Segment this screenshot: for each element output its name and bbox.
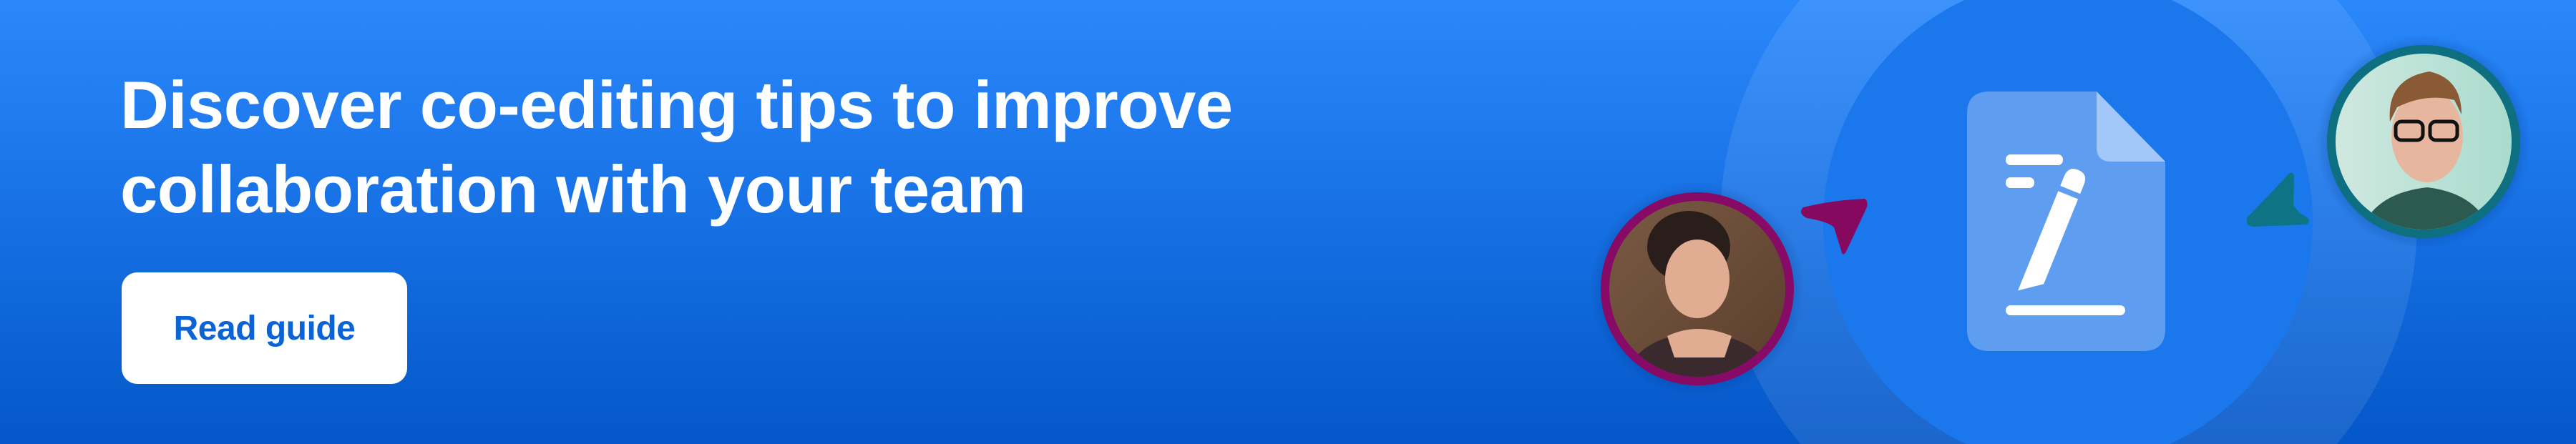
arrow: teal cursor (2247, 173, 2309, 227)
title: Discover co-editing tips to improve (120, 67, 1233, 142)
illustration (1595, 0, 2526, 444)
outer ring (1720, 0, 2417, 444)
button (122, 272, 407, 384)
avatar: man (2316, 34, 2531, 249)
title: collaboration with your team (120, 152, 1026, 227)
arrow: purple cursor (1801, 199, 1868, 255)
title (120, 67, 1233, 227)
button: Read guide (174, 309, 355, 347)
icon: document with pencil (1967, 92, 2165, 351)
inner circle (1823, 0, 2313, 444)
avatar: woman (1590, 182, 1805, 396)
